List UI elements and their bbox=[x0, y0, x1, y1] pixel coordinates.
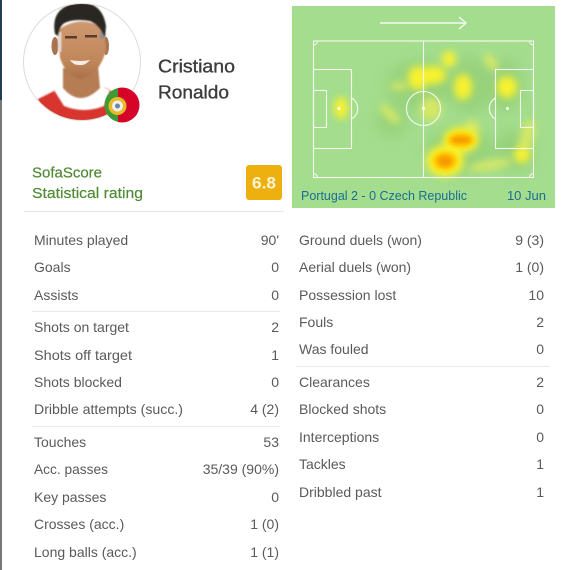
panel: left stats: 1 (1) bbox=[250, 544, 279, 560]
panel: right stats: Blocked shots bbox=[299, 401, 386, 417]
panel: right stats: 0 bbox=[536, 401, 544, 417]
rating badge bbox=[246, 165, 282, 200]
match caption: Portugal 2 - 0 Czech Republic bbox=[301, 188, 467, 203]
panel: right stats: 0 bbox=[536, 341, 544, 357]
panel: right stats: 1 bbox=[536, 456, 544, 472]
top divider bbox=[24, 210, 284, 212]
panel: left stats: Minutes played bbox=[34, 232, 128, 248]
panel: left stats: 1 bbox=[271, 347, 279, 363]
panel: left stats: Shots blocked bbox=[34, 374, 122, 390]
panel: left stats: Touches bbox=[34, 434, 86, 450]
icon: Portugal flag bbox=[104, 87, 141, 123]
rating badge: 6.8 bbox=[252, 174, 276, 192]
panel: left stats: Goals bbox=[34, 259, 71, 275]
panel: left stats: Shots off target bbox=[34, 347, 132, 363]
panel: right stats: 10 bbox=[528, 287, 544, 303]
panel: left stats: 2 bbox=[271, 319, 279, 335]
match date: 10 Jun bbox=[507, 188, 546, 203]
panel: left stats bbox=[32, 232, 280, 560]
face bbox=[58, 21, 106, 79]
panel: right stats: Possession lost bbox=[299, 287, 396, 303]
panel: left stats: 53 bbox=[263, 434, 279, 450]
icon: attack direction arrow bbox=[380, 17, 466, 29]
panel: right stats: Ground duels (won) bbox=[299, 232, 422, 248]
panel: right stats: 1 (0) bbox=[515, 259, 544, 275]
panel: left stats: Crosses (acc.) bbox=[34, 516, 124, 532]
panel: left stats: Assists bbox=[34, 287, 78, 303]
panel: left stats: 90' bbox=[261, 232, 279, 248]
panel: left stats: 4 (2) bbox=[250, 401, 279, 417]
panel: right stats: 1 bbox=[536, 484, 544, 500]
panel: right stats: 0 bbox=[536, 429, 544, 445]
rating label bbox=[32, 164, 143, 202]
shirt bbox=[37, 87, 112, 120]
neck bbox=[63, 66, 100, 98]
panel: right stats: Was fouled bbox=[299, 341, 369, 357]
panel: left stats: Shots on target bbox=[34, 319, 129, 335]
panel: left stats: 0 bbox=[271, 259, 279, 275]
player photo bbox=[24, 3, 140, 125]
panel: right stats bbox=[296, 232, 550, 500]
panel: right stats: 9 (3) bbox=[515, 232, 544, 248]
panel: left stats: Acc. passes bbox=[34, 461, 108, 477]
panel: right stats: Dribbled past bbox=[299, 484, 382, 500]
temples bbox=[58, 32, 62, 52]
rating label: SofaScore bbox=[32, 164, 102, 182]
panel: right stats: 2 bbox=[536, 314, 544, 330]
heat blobs bbox=[334, 51, 538, 177]
panel: left stats: Dribble attempts (succ.) bbox=[34, 401, 183, 417]
smile bbox=[70, 60, 90, 65]
panel: left stats: 0 bbox=[271, 374, 279, 390]
panel: left stats: 0 bbox=[271, 489, 279, 505]
player name bbox=[158, 56, 235, 102]
panel: left stats: 0 bbox=[271, 287, 279, 303]
panel: left stats: Key passes bbox=[34, 489, 106, 505]
panel: right stats: Tackles bbox=[299, 456, 346, 472]
panel: right stats: 2 bbox=[536, 374, 544, 390]
panel: left stats: 1 (0) bbox=[250, 516, 279, 532]
pitch lines bbox=[314, 41, 534, 178]
rating label: Statistical rating bbox=[32, 185, 143, 202]
player name: Ronaldo bbox=[158, 82, 229, 102]
panel: left stats: 35/39 (90%) bbox=[203, 461, 279, 477]
panel: right stats: Clearances bbox=[299, 374, 370, 390]
panel: left stats: Long balls (acc.) bbox=[34, 544, 137, 560]
eyes bbox=[65, 36, 77, 38]
heatmap panel bbox=[292, 6, 555, 208]
panel: right stats: Aerial duels (won) bbox=[299, 259, 411, 275]
collar bbox=[54, 85, 110, 110]
hair bbox=[54, 3, 106, 38]
panel: right stats: Interceptions bbox=[299, 429, 379, 445]
panel: right stats: Fouls bbox=[299, 314, 333, 330]
player name: Cristiano bbox=[158, 56, 235, 76]
ears bbox=[52, 37, 58, 55]
